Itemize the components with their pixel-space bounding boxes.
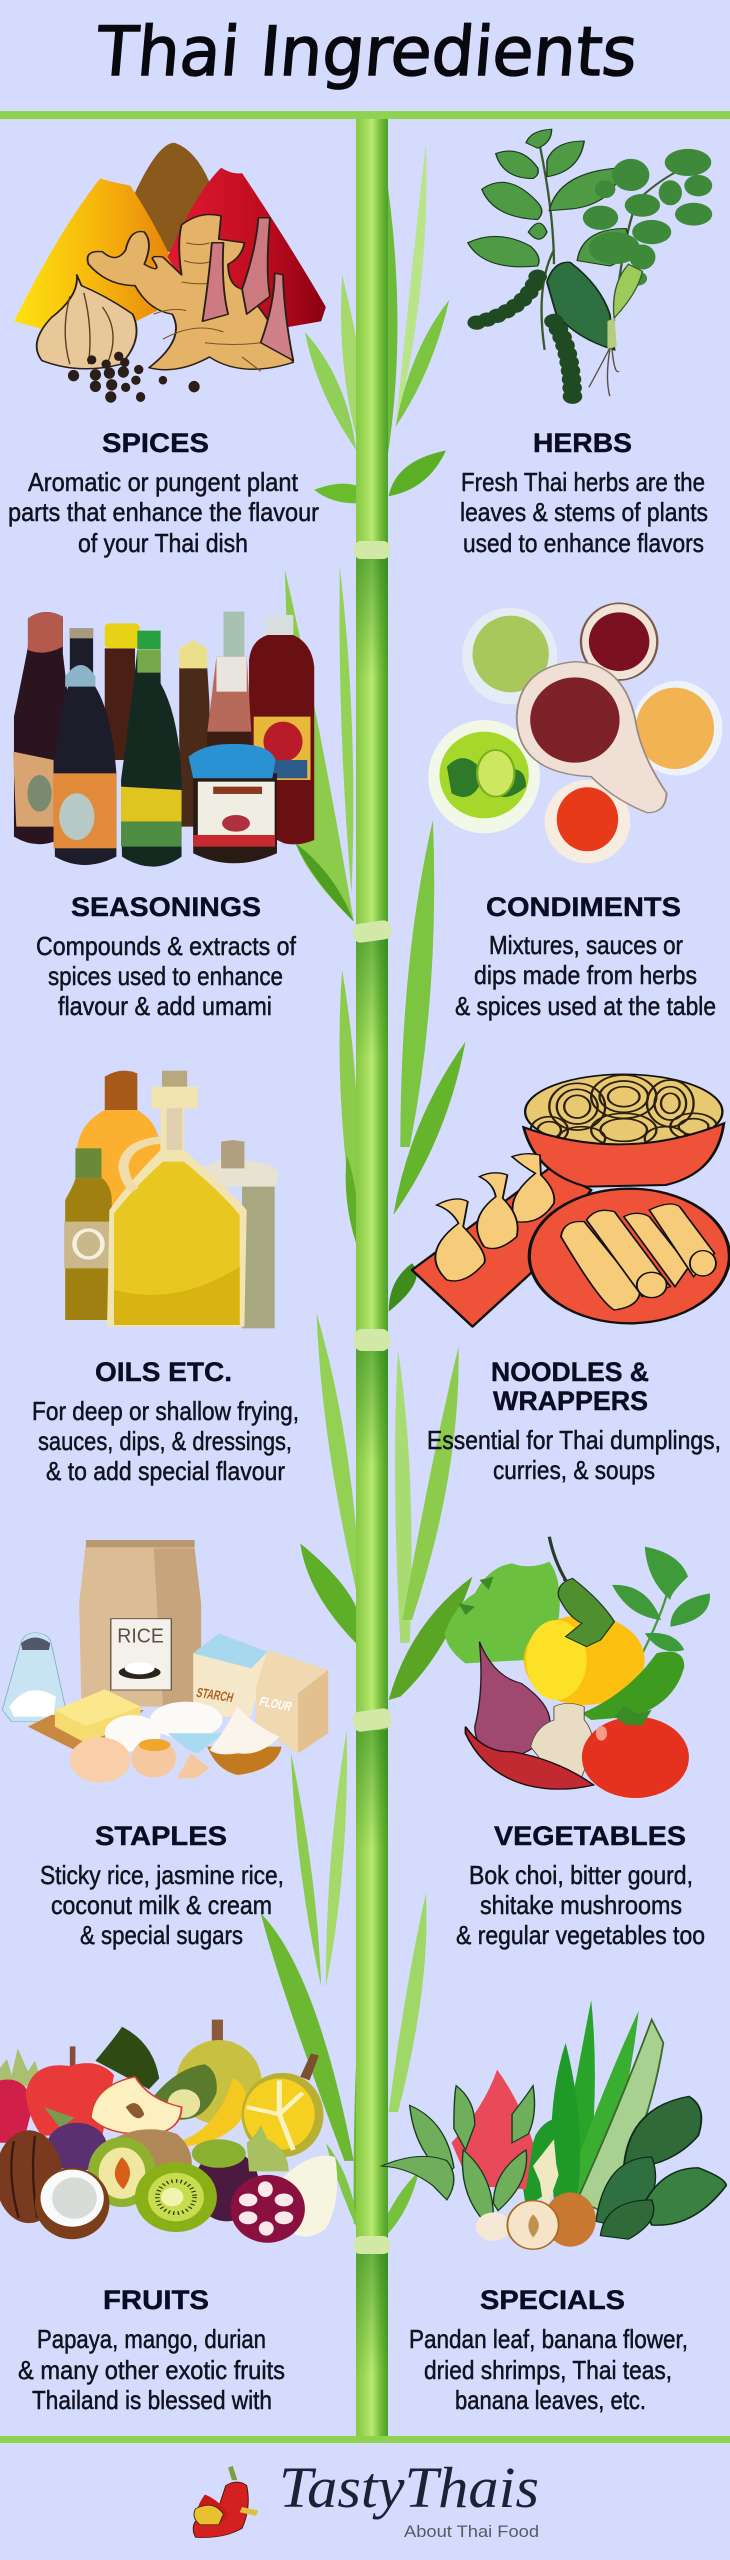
- description: oils: For deep or shallow frying,: [32, 1396, 299, 1426]
- description: fruits: Papaya, mango, durian: [37, 2324, 266, 2354]
- description: spices: parts that enhance the flavour: [8, 497, 319, 527]
- description: fruits: [18, 2324, 285, 2415]
- brand name: TastyThais: [279, 2455, 539, 2520]
- description: vegetables: [456, 1860, 705, 1950]
- description: oils: & to add special flavour: [46, 1456, 285, 1486]
- description: oils: sauces, dips, & dressings,: [38, 1426, 292, 1456]
- heading: fruits: FRUITS: [103, 2285, 209, 2315]
- icon: special ingredients: [382, 2000, 726, 2249]
- panel: fruits: [0, 2020, 337, 2415]
- bamboo leaves behind stem: [261, 143, 472, 2236]
- icon: herbs: [468, 129, 712, 403]
- heading: condiments: CONDIMENTS: [486, 892, 681, 922]
- description: staples: & special sugars: [80, 1920, 243, 1950]
- icon: staples: RICE: [117, 1625, 164, 1648]
- panel: seasonings: [13, 612, 314, 1021]
- icon: spice pile: [14, 143, 326, 403]
- tagline: About Thai Food: [404, 2522, 539, 2541]
- heading: staples: STAPLES: [95, 1821, 227, 1851]
- heading: noodles and wrappers: [491, 1357, 649, 1416]
- panel: herbs: [460, 129, 712, 558]
- description: condiments: Mixtures, sauces or: [489, 930, 683, 960]
- description: staples: [40, 1860, 284, 1950]
- heading: vegetables: VEGETABLES: [494, 1821, 686, 1851]
- icon: sauce bottles: [13, 612, 314, 867]
- panel: specials: [382, 2000, 726, 2415]
- description: staples: coconut milk & cream: [51, 1890, 272, 1920]
- description: spices: Aromatic or pungent plant: [28, 467, 299, 497]
- description: spices: of your Thai dish: [78, 528, 248, 558]
- description: spices: [8, 467, 319, 558]
- description: seasonings: Compounds & extracts of: [36, 931, 297, 961]
- description: seasonings: [36, 931, 297, 1021]
- top divider: [0, 111, 730, 119]
- description: vegetables: Bok choi, bitter gourd,: [469, 1860, 693, 1890]
- description: specials: dried shrimps, Thai teas,: [424, 2355, 672, 2385]
- description: vegetables: & regular vegetables too: [456, 1920, 705, 1950]
- icon: oil bottles: [64, 1071, 279, 1328]
- icon: fruit pile: [0, 2020, 337, 2243]
- description: seasonings: flavour & add umami: [58, 991, 272, 1021]
- icon: staples: [2, 1540, 328, 1783]
- description: condiments: [455, 930, 716, 1021]
- logo: [193, 2455, 539, 2541]
- icon: dipping bowls: [428, 603, 722, 863]
- icon: chili mascot: [193, 2466, 258, 2538]
- icon: noodles and wrappers: [412, 1074, 729, 1327]
- title: Thai Ingredients: [93, 13, 640, 92]
- description: herbs: [460, 467, 708, 558]
- description: fruits: Thailand is blessed with: [32, 2385, 272, 2415]
- description: noodles: [427, 1425, 721, 1485]
- description: specials: Pandan leaf, banana flower,: [409, 2324, 688, 2354]
- heading: noodles and wrappers: WRAPPERS: [493, 1386, 648, 1416]
- panel: oils: [32, 1071, 299, 1486]
- panel: condiments: [428, 603, 722, 1021]
- heading: seasonings: SEASONINGS: [71, 892, 261, 922]
- description: seasonings: spices used to enhance: [48, 961, 283, 991]
- description: noodles: curries, & soups: [493, 1455, 655, 1485]
- panel: vegetables: [445, 1537, 710, 1950]
- heading: herbs: HERBS: [533, 428, 632, 458]
- description: fruits: & many other exotic fruits: [18, 2355, 285, 2385]
- description: specials: banana leaves, etc.: [455, 2385, 646, 2415]
- description: specials: [409, 2324, 688, 2415]
- heading: oils: OILS ETC.: [95, 1357, 232, 1387]
- panel: spices: [8, 143, 326, 558]
- panel: noodles: [412, 1074, 729, 1485]
- description: vegetables: shitake mushrooms: [480, 1890, 682, 1920]
- icon: staples: STARCH: [195, 1685, 235, 1705]
- description: staples: Sticky rice, jasmine rice,: [40, 1860, 284, 1890]
- bamboo stem: [352, 119, 392, 2436]
- heading: spices: SPICES: [102, 428, 209, 458]
- panel: staples: [2, 1540, 328, 1950]
- heading: specials: SPECIALS: [480, 2285, 625, 2315]
- description: oils: [32, 1396, 299, 1486]
- heading: noodles and wrappers: NOODLES &: [491, 1357, 649, 1387]
- icon: vegetables: [445, 1537, 710, 1798]
- bottom divider: [0, 2436, 730, 2443]
- description: condiments: dips made from herbs: [474, 960, 697, 990]
- icon: staples: FLOUR: [257, 1695, 294, 1714]
